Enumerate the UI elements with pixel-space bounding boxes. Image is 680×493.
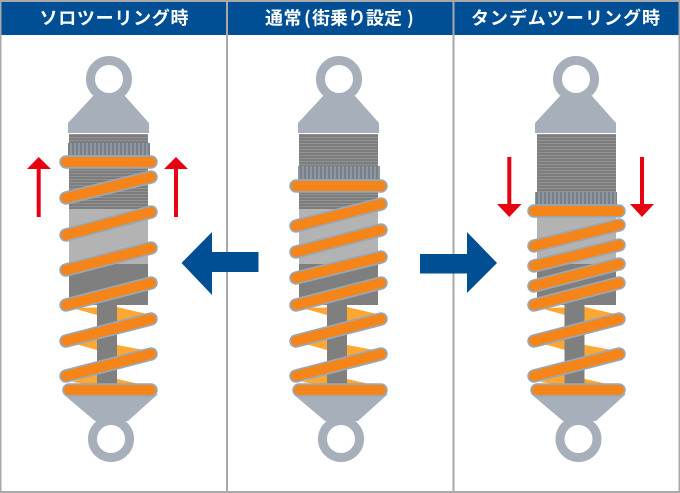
bottom mount [293,394,388,458]
heading: normal setting [228,2,452,35]
arrow: blue right [420,232,497,293]
top mount [298,60,379,133]
piston rod [564,305,584,384]
top mount [68,60,149,133]
shock absorber: normal [293,60,388,458]
top mount [535,60,616,133]
spring [534,211,619,390]
arrow: red down left [497,157,522,217]
rear coil segments [302,307,377,386]
heading: solo touring: ソロツーリング時 [40,8,188,28]
shock body [68,134,150,305]
piston rod [97,305,117,384]
arrow: red up left [27,157,51,217]
heading: tandem touring: タンデムツーリング時 [471,8,660,28]
heading: normal setting: 通常(街乗り設定) [265,4,414,30]
arrow: red up right [164,157,188,217]
shock body [298,134,380,305]
arrow: red down right [630,157,654,217]
spring [296,186,381,390]
rear coil segments [540,307,615,386]
arrow: blue left [182,232,258,295]
piston rod [327,305,347,384]
spring [66,162,151,390]
shock body [535,134,617,305]
heading: solo touring [2,2,226,35]
bottom mount [531,394,626,458]
shock absorber: tandem touring [531,60,626,458]
bottom mount [63,394,158,458]
shock absorber: solo touring [63,60,158,458]
rear coil segments [72,307,147,386]
heading: tandem touring [454,2,678,35]
